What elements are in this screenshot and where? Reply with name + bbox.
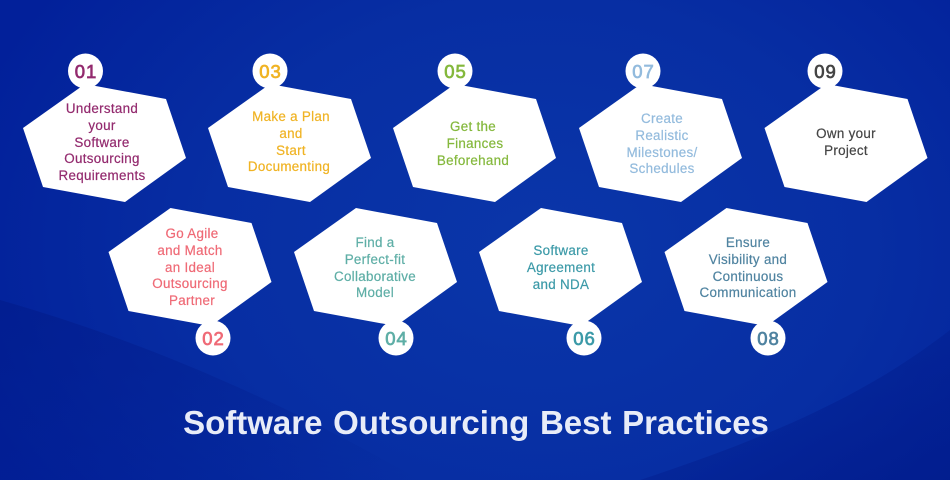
step 03: and bbox=[279, 126, 303, 141]
step 06: 06 bbox=[573, 328, 596, 349]
step 02: and Match bbox=[157, 243, 223, 258]
step 04: Model bbox=[356, 285, 394, 300]
step 05: Get the bbox=[450, 119, 496, 134]
step 06: and NDA bbox=[533, 277, 589, 292]
step 09: Own your bbox=[816, 126, 876, 141]
step 08 bbox=[664, 208, 828, 356]
step 01 bbox=[23, 54, 186, 202]
step 08: Visibility and bbox=[709, 252, 787, 267]
step 07 bbox=[579, 54, 742, 202]
step 06: Software bbox=[533, 243, 589, 258]
step 02: an Ideal bbox=[165, 260, 215, 275]
step 09 bbox=[764, 54, 928, 202]
step 05: Beforehand bbox=[437, 153, 509, 168]
step 02: 02 bbox=[202, 328, 225, 349]
step 02: Outsourcing bbox=[152, 276, 228, 291]
step 02: Go Agile bbox=[165, 226, 219, 241]
step 04: Find a bbox=[355, 235, 395, 250]
step 04: Perfect-fit bbox=[345, 252, 405, 267]
step 07: Create bbox=[641, 111, 683, 126]
step 01: Requirements bbox=[59, 168, 145, 183]
step 07: 07 bbox=[632, 61, 655, 82]
step 02 bbox=[108, 208, 272, 356]
step 01: Outsourcing bbox=[64, 151, 140, 166]
step 09: Project bbox=[824, 143, 868, 158]
step 08: Continuous bbox=[713, 269, 783, 284]
step 07: Schedules bbox=[629, 161, 695, 176]
step 08: 08 bbox=[757, 328, 780, 349]
step 04: 04 bbox=[385, 328, 408, 349]
step 01: your bbox=[88, 118, 116, 133]
step 03: Make a Plan bbox=[252, 109, 330, 124]
step 02: Partner bbox=[169, 293, 215, 308]
step 03: 03 bbox=[259, 61, 282, 82]
step 05 bbox=[393, 54, 556, 202]
step 08: Ensure bbox=[726, 235, 770, 250]
step 04: Collaborative bbox=[334, 269, 416, 284]
step 03: Start bbox=[276, 143, 306, 158]
step 03: Documenting bbox=[248, 159, 330, 174]
step 01: Understand bbox=[66, 101, 138, 116]
step 06: Agreement bbox=[527, 260, 595, 275]
step 06 bbox=[479, 208, 642, 356]
step 05: Finances bbox=[447, 136, 503, 151]
title: Software Outsourcing Best Practices bbox=[183, 404, 769, 441]
step 05: 05 bbox=[444, 61, 467, 82]
step 03 bbox=[208, 54, 371, 202]
step 01: Software bbox=[74, 135, 130, 150]
step 01: 01 bbox=[75, 61, 97, 82]
step 09: 09 bbox=[814, 61, 837, 82]
step 07: Milestones/ bbox=[626, 145, 698, 160]
step 04 bbox=[294, 208, 457, 356]
step 07: Realistic bbox=[635, 128, 689, 143]
step 08: Communication bbox=[700, 285, 796, 300]
